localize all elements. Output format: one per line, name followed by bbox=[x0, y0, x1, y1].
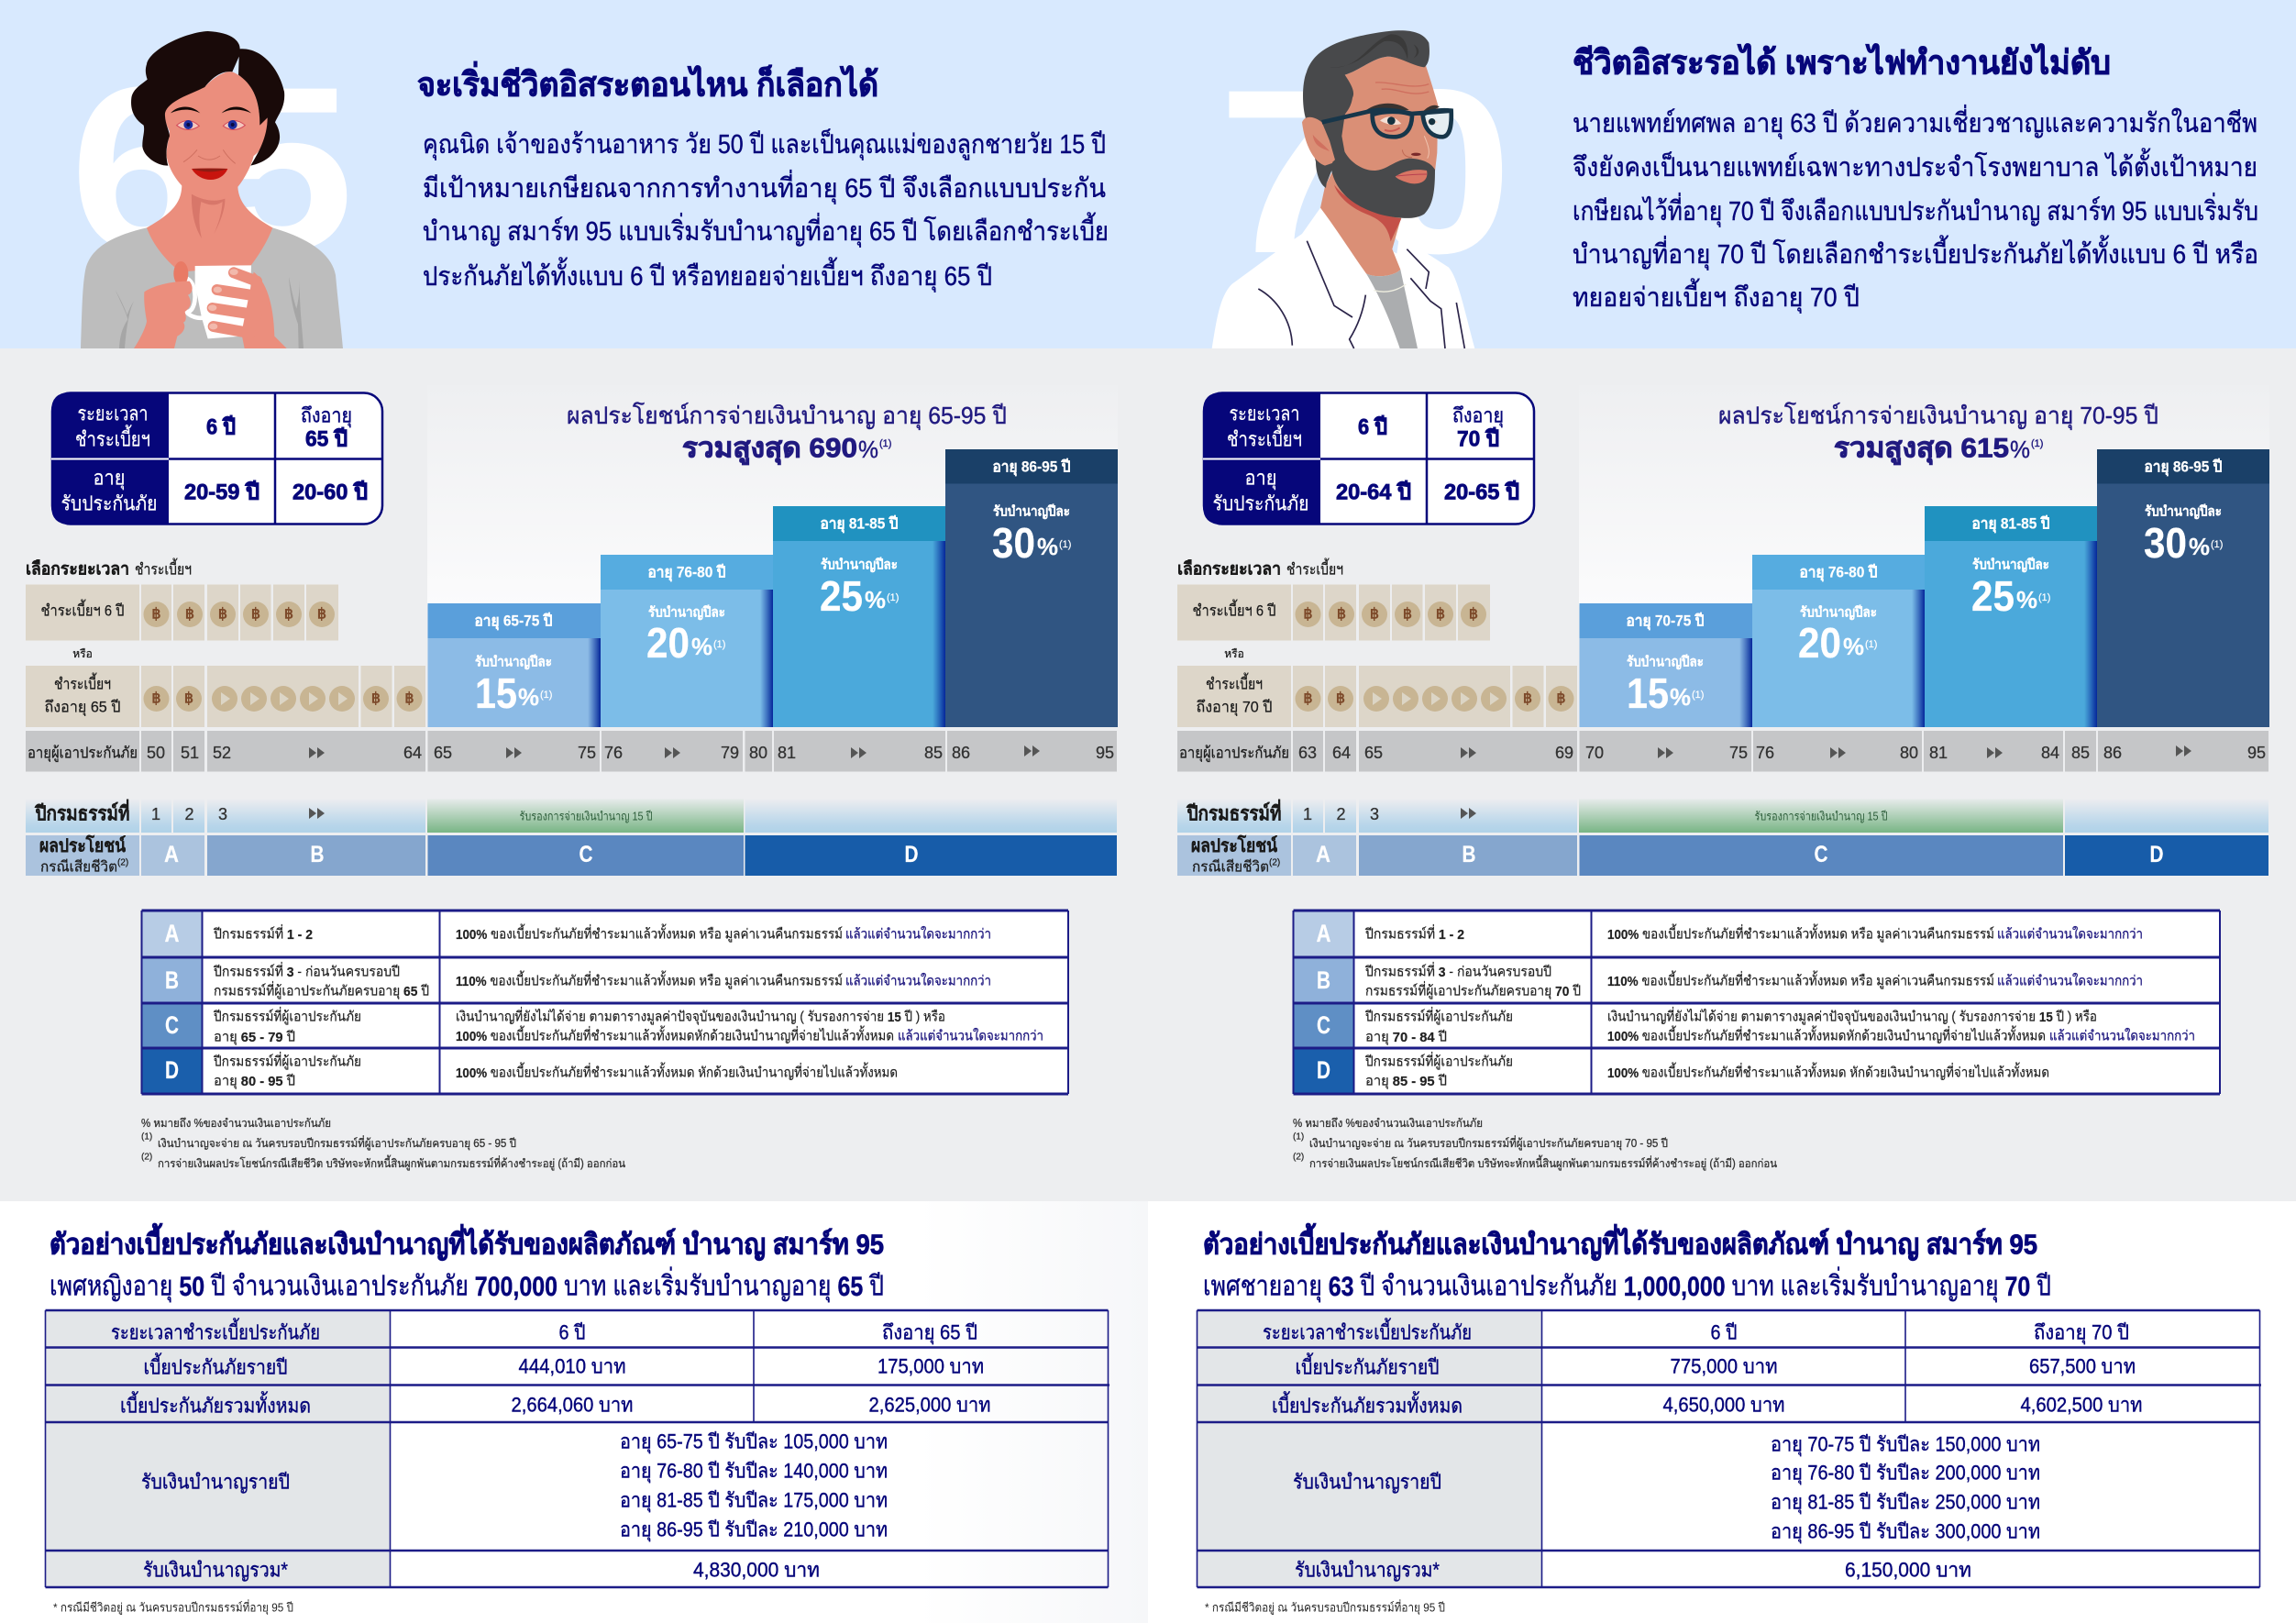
text block: left top body: คุณนิด เจ้าของร้านอาหาร วัย 50 ปี และเป็นคุณแม่ของลูกชายวัย 15 ปี bbox=[423, 127, 1106, 160]
table: right premium and pension example: 6,150,000 บาท bbox=[1845, 1559, 1971, 1581]
row: insured age timeline: 75 bbox=[1729, 744, 1748, 762]
text block: footnotes: (1) bbox=[1293, 1132, 1304, 1143]
bar: age 81-85: (1) bbox=[887, 592, 899, 603]
text block: footnotes: % หมายถึง %ของจำนวนเงินเอาประกันภัย bbox=[141, 1117, 331, 1130]
table: death benefit conditions: 110% ของเบี้ยประกันภัยที่ชำระมาแล้วทั้งหมด หรือ มูลค่าเวนคืนกรมธรรม์ bbox=[1607, 970, 1994, 988]
row: death benefit bands: D bbox=[904, 842, 919, 867]
row: pay 6 years: ฿ bbox=[1337, 607, 1346, 622]
table: premium term and entry age: ชำระเบี้ยฯ bbox=[1227, 425, 1302, 451]
row: policy year: 1 bbox=[1303, 805, 1312, 823]
table: premium term and entry age: ระยะเวลา bbox=[1229, 402, 1300, 425]
table: right premium and pension example: อายุ 81-85 ปี รับปีละ 250,000 บาท bbox=[1771, 1491, 2040, 1515]
bar: age 86-95: (1) bbox=[1059, 539, 1071, 550]
heading: chart title: (1) bbox=[879, 438, 891, 449]
text block: footnotes: การจ่ายเงินผลประโยชน์กรณีเสียชีวิต บริษัทจะหักหนี้สินผูกพันตามกรมธรรม์ที่ค้างชำระอยู่ (ถ้ามี) ออกก่อน bbox=[1309, 1154, 1777, 1171]
table: death benefit conditions: ปีกรมธรรม์ที่ผู้เอาประกันภัย bbox=[213, 1051, 361, 1069]
table: right premium and pension example: 657,500 บาท bbox=[2029, 1355, 2136, 1377]
row: death benefit bands bbox=[1177, 834, 2268, 876]
text block: left example note: * กรณีมีชีวิตอยู่ ณ วันครบรอบปีกรมธรรม์ที่อายุ 95 ปี bbox=[53, 1599, 293, 1616]
row: insured age timeline: 79 bbox=[721, 744, 739, 762]
row: insured age timeline: 95 bbox=[2247, 744, 2266, 762]
row: policy year bbox=[26, 798, 1117, 833]
label: or: หรือ bbox=[72, 647, 93, 660]
row: pay 6 years bbox=[26, 585, 338, 640]
row: death benefit bands: กรณีเสียชีวิต bbox=[1192, 858, 1269, 875]
row: policy year: 3 bbox=[1370, 805, 1379, 823]
row: insured age timeline: 64 bbox=[1332, 744, 1351, 762]
bar: age 81-85 bbox=[773, 506, 945, 727]
row: pay 6 years: ชำระเบี้ยฯ 6 ปี bbox=[1192, 600, 1276, 620]
row: insured age timeline: 76 bbox=[1756, 744, 1774, 762]
bar: age 76-80: รับบำนาญปีละ bbox=[648, 605, 725, 620]
row: pay until age 65: ถึงอายุ 65 ปี bbox=[44, 699, 121, 717]
row: death benefit bands: B bbox=[1462, 842, 1476, 867]
table: death benefit conditions: อายุ 70 - 84 ปี bbox=[1365, 1029, 1447, 1045]
table: death benefit conditions: แล้วแต่จำนวนใดจะมากกว่า bbox=[845, 972, 991, 988]
chart: pension benefit steps bbox=[427, 385, 1118, 727]
table: premium term and entry age: อายุ bbox=[94, 466, 125, 490]
bar: age 81-85: % bbox=[2016, 586, 2037, 613]
bar: age 86-95 bbox=[2097, 449, 2269, 727]
table: right premium and pension example bbox=[1198, 1310, 2261, 1587]
row: insured age timeline: 65 bbox=[1364, 744, 1383, 762]
table: left premium and pension example: รับเงินบำนาญรวม* bbox=[143, 1559, 288, 1581]
table: premium term and entry age: 6 ปี bbox=[1358, 414, 1387, 440]
table: death benefit conditions: 100% ของเบี้ยประกันภัยที่ชำระมาแล้วทั้งหมด หักด้วยเงินบำนาญที่จ่ายไปแล้วทั้งหมด bbox=[1607, 1062, 2049, 1080]
bar: age 81-85 bbox=[1925, 506, 2097, 727]
row: policy year: 2 bbox=[1336, 805, 1346, 823]
row: death benefit bands: C bbox=[580, 842, 592, 867]
row: policy year: ปีกรมธรรม์ที่ bbox=[34, 798, 130, 825]
heading: left top title: จะเริ่มชีวิตอิสระตอนไหน ก็เลือกได้ bbox=[417, 61, 878, 103]
row: pay until age 65: ฿ bbox=[151, 691, 161, 706]
row: insured age timeline: 70 bbox=[1585, 744, 1604, 762]
row: insured age timeline: 84 bbox=[2041, 744, 2059, 762]
table: left premium and pension example: อายุ 65-75 ปี รับปีละ 105,000 บาท bbox=[620, 1430, 888, 1454]
bar: age 76-80: % bbox=[691, 633, 712, 660]
row: insured age timeline: 86 bbox=[2103, 744, 2122, 762]
bar: age 81-85: อายุ 81-85 ปี bbox=[820, 513, 899, 534]
bar: age 76-80: รับบำนาญปีละ bbox=[1800, 605, 1877, 620]
text block: footnotes: การจ่ายเงินผลประโยชน์กรณีเสียชีวิต บริษัทจะหักหนี้สินผูกพันตามกรมธรรม์ที่ค้างชำระอยู่ (ถ้ามี) ออกก่อน bbox=[158, 1154, 625, 1171]
row: insured age timeline: 75 bbox=[578, 744, 596, 762]
table: premium term and entry age bbox=[1203, 392, 1534, 524]
table: death benefit conditions bbox=[141, 911, 1068, 1094]
heading: right top title: ชีวิตอิสระรอได้ เพราะไฟทำงานยังไม่ดับ bbox=[1573, 42, 2111, 81]
table: right premium and pension example: ระยะเวลาชำระเบี้ยประกันภัย bbox=[1263, 1319, 1472, 1344]
bar: age 76-80: อายุ 76-80 ปี bbox=[1799, 563, 1878, 581]
row: insured age timeline: 69 bbox=[1555, 744, 1573, 762]
heading: choose premium term: ชำระเบี้ยฯ bbox=[135, 558, 192, 578]
row: insured age timeline bbox=[26, 731, 1117, 772]
row: pay until age 65: ฿ bbox=[404, 691, 414, 706]
row: policy year: ปีกรมธรรม์ที่ bbox=[1186, 798, 1282, 825]
bar: age 65-75: (1) bbox=[540, 690, 552, 701]
table: premium term and entry age: 20-64 ปี bbox=[1336, 480, 1411, 504]
table: death benefit conditions: อายุ 85 - 95 ปี bbox=[1365, 1073, 1447, 1089]
bar: age 86-95 bbox=[945, 449, 1118, 727]
row: policy year: 1 bbox=[151, 805, 160, 823]
text block: footnotes: (2) bbox=[141, 1152, 152, 1163]
icon: woman illustration bbox=[81, 31, 343, 348]
table: right premium and pension example: ถึงอายุ 70 ปี bbox=[2034, 1320, 2129, 1344]
text block: left top body: บำนาญ สมาร์ท 95 แบบเริ่มรับบำนาญที่อายุ 65 ปี โดยเลือกชำระเบี้ย bbox=[423, 212, 1109, 248]
panel: bottom white background left bbox=[0, 1201, 1148, 1623]
table: premium term and entry age: รับประกันภัย bbox=[1212, 491, 1309, 515]
table: right premium and pension example: อายุ 70-75 ปี รับปีละ 150,000 บาท bbox=[1771, 1432, 2040, 1456]
text block: left top body bbox=[423, 127, 1109, 293]
row: pay until age 70: ถึงอายุ 70 ปี bbox=[1196, 699, 1273, 717]
row: policy year: รับรองการจ่ายเงินบำนาญ 15 ปี bbox=[519, 809, 653, 823]
heading: chart title: ผลประโยชน์การจ่ายเงินบำนาญ อายุ 65-95 ปี bbox=[567, 402, 1007, 430]
table: death benefit conditions: 100% ของเบี้ยประกันภัยที่ชำระมาแล้วทั้งหมด หรือ มูลค่าเวนคืนกรมธรรม์ bbox=[456, 924, 843, 943]
row: pay until age 70 bbox=[1177, 666, 1577, 727]
heading: choose premium term: เลือกระยะเวลา bbox=[1177, 559, 1281, 580]
text block: footnotes bbox=[1293, 1117, 1777, 1171]
row: pay until age 70: ฿ bbox=[1523, 691, 1532, 706]
label: or: หรือ bbox=[1224, 647, 1244, 660]
bar: age 81-85: รับบำนาญปีละ bbox=[821, 558, 898, 572]
row: death benefit bands: B bbox=[310, 842, 325, 867]
table: premium term and entry age: ระยะเวลา bbox=[77, 402, 149, 425]
heading: choose premium term bbox=[1177, 558, 1343, 580]
bar: age 76-80: อายุ 76-80 ปี bbox=[647, 563, 726, 581]
bar: age 86-95: อายุ 86-95 ปี bbox=[992, 457, 1071, 477]
bar: age 86-95: รับบำนาญปีละ bbox=[2145, 504, 2222, 519]
row: pay 6 years: ฿ bbox=[284, 607, 293, 622]
row: pay 6 years: ฿ bbox=[1403, 607, 1412, 622]
panel: middle grey background right bbox=[1148, 348, 2296, 1201]
bar: age 76-80: (1) bbox=[1865, 639, 1877, 650]
text block: footnotes: % หมายถึง %ของจำนวนเงินเอาประกันภัย bbox=[1293, 1117, 1483, 1130]
table: death benefit conditions: เงินบำนาญที่ยังไม่ได้จ่าย ตามตารางมูลค่าปัจจุบันของเงินบำนาญ ( รับรองการจ่าย 15 ปี ) หรือ bbox=[456, 1007, 945, 1025]
panel: bottom white background right bbox=[1148, 1201, 2296, 1623]
table: right premium and pension example: รับเงินบำนาญรวม* bbox=[1295, 1559, 1440, 1581]
bar: age 81-85: อายุ 81-85 ปี bbox=[1971, 513, 2050, 534]
bar: age 76-80 bbox=[1752, 555, 1925, 727]
row: insured age timeline: 81 bbox=[1929, 744, 1948, 762]
table: death benefit conditions: C bbox=[165, 1011, 179, 1039]
table: death benefit conditions: แล้วแต่จำนวนใดจะมากกว่า bbox=[898, 1027, 1043, 1043]
table: left premium and pension example: 444,010 บาท bbox=[519, 1355, 625, 1377]
bar: age 65-75: % bbox=[518, 683, 539, 711]
row: death benefit bands: A bbox=[1316, 842, 1330, 867]
row: pay until age 65 bbox=[26, 666, 425, 727]
row: policy year bbox=[1177, 798, 2268, 833]
row: pay 6 years: ฿ bbox=[1469, 607, 1478, 622]
row: insured age timeline: 51 bbox=[181, 744, 199, 762]
panel: right page top band bbox=[1148, 0, 2296, 348]
table: premium term and entry age: ถึงอายุ bbox=[1452, 403, 1504, 427]
table: left premium and pension example: อายุ 81-85 ปี รับปีละ 175,000 บาท bbox=[620, 1489, 888, 1513]
bar: age 81-85: 25 bbox=[820, 572, 863, 620]
bar: age 86-95: อายุ 86-95 ปี bbox=[2144, 457, 2223, 477]
row: pay 6 years: ฿ bbox=[251, 607, 260, 622]
table: left premium and pension example bbox=[46, 1310, 1109, 1587]
row: insured age timeline: 65 bbox=[434, 744, 452, 762]
row: insured age timeline: 64 bbox=[403, 744, 422, 762]
bar: age 76-80: (1) bbox=[713, 639, 725, 650]
row: pay 6 years: ชำระเบี้ยฯ 6 ปี bbox=[40, 600, 125, 620]
bar: age 81-85: (1) bbox=[2038, 592, 2050, 603]
big number 70: 70 bbox=[1218, 41, 1513, 303]
table: death benefit conditions: กรมธรรม์ที่ผู้เอาประกันภัยครบอายุ 65 ปี bbox=[214, 981, 429, 999]
heading: left example title: ตัวอย่างเบี้ยประกันภัยและเงินบำนาญที่ได้รับของผลิตภัณฑ์ บำนาญ สมาร์ท 95 bbox=[50, 1223, 884, 1262]
table: left premium and pension example: ระยะเวลาชำระเบี้ยประกันภัย bbox=[111, 1319, 320, 1344]
row: death benefit bands: ผลประโยชน์ bbox=[39, 834, 126, 856]
icon: bearded doctor illustration bbox=[1212, 30, 1474, 348]
row: policy year: 2 bbox=[184, 805, 194, 823]
heading: chart title: (1) bbox=[2031, 438, 2043, 449]
row: death benefit bands: A bbox=[164, 842, 179, 867]
chart: pension benefit steps bbox=[1579, 385, 2269, 727]
bar: age 76-80: 20 bbox=[1798, 619, 1841, 667]
table: death benefit conditions: 100% ของเบี้ยประกันภัยที่ชำระมาแล้วทั้งหมด หักด้วยเงินบำนาญที่จ่ายไปแล้วทั้งหมด bbox=[456, 1062, 898, 1080]
panel: left plan section bbox=[26, 385, 1118, 1616]
text block: footnotes: (1) bbox=[141, 1132, 152, 1143]
bar: age 65-75: รับบำนาญปีละ bbox=[475, 655, 552, 669]
table: death benefit conditions: 110% ของเบี้ยประกันภัยที่ชำระมาแล้วทั้งหมด หรือ มูลค่าเวนคืนกรมธรรม์ bbox=[456, 970, 843, 988]
bar: age 86-95: 30 bbox=[2144, 519, 2187, 567]
bar: age 70-75: 15 bbox=[1627, 669, 1669, 717]
text block: footnotes: (2) bbox=[1293, 1152, 1304, 1163]
row: insured age timeline: อายุผู้เอาประกันภัย bbox=[28, 745, 138, 763]
heading: chart title: % bbox=[858, 436, 878, 463]
table: right premium and pension example: เบี้ยประกันภัยรวมทั้งหมด bbox=[1272, 1392, 1463, 1418]
text block: left top body: มีเป้าหมายเกษียณจากการทำงานที่อายุ 65 ปี จึงเลือกแบบประกัน bbox=[423, 170, 1106, 204]
heading: chart title bbox=[567, 402, 1007, 466]
table: left premium and pension example: ถึงอายุ 65 ปี bbox=[882, 1320, 977, 1344]
row: pay until age 70: ฿ bbox=[1336, 691, 1345, 706]
panel: middle grey background left bbox=[0, 348, 1148, 1201]
table: death benefit conditions: 100% ของเบี้ยประกันภัยที่ชำระมาแล้วทั้งหมดหักด้วยเงินบำนาญที่จ่ายไปแล้วทั้งหมด bbox=[456, 1025, 894, 1043]
table: left premium and pension example: 2,625,000 บาท bbox=[869, 1394, 990, 1416]
table: premium term and entry age: รับประกันภัย bbox=[61, 491, 158, 515]
row: pay 6 years: ฿ bbox=[1370, 607, 1379, 622]
heading: right example title: ตัวอย่างเบี้ยประกันภัยและเงินบำนาญที่ได้รับของผลิตภัณฑ์ บำนาญ สมาร์ท 95 bbox=[1203, 1223, 2037, 1262]
bar: age 76-80 bbox=[601, 555, 773, 727]
table: death benefit conditions: แล้วแต่จำนวนใดจะมากกว่า bbox=[1997, 972, 2143, 988]
table: death benefit conditions: แล้วแต่จำนวนใดจะมากกว่า bbox=[1997, 926, 2143, 943]
table: death benefit conditions: ปีกรมธรรม์ที่ 3 - ก่อนวันครบรอบปี bbox=[1364, 961, 1551, 979]
row: pay 6 years bbox=[1177, 585, 1490, 640]
table: premium term and entry age: ถึงอายุ bbox=[301, 403, 352, 427]
row: insured age timeline: 85 bbox=[2071, 744, 2090, 762]
text block: footnotes: เงินบำนาญจะจ่าย ณ วันครบรอบปีกรมธรรม์ที่ผู้เอาประกันภัยครบอายุ 65 - 95 ปี bbox=[158, 1135, 516, 1151]
row: insured age timeline: 50 bbox=[147, 744, 165, 762]
table: left premium and pension example: 175,000 บาท bbox=[878, 1355, 984, 1377]
row: insured age timeline: 63 bbox=[1298, 744, 1317, 762]
table: premium term and entry age: 20-65 ปี bbox=[1444, 480, 1519, 504]
table: left premium and pension example: รับเงินบำนาญรายปี bbox=[141, 1471, 290, 1493]
table: premium term and entry age: 65 ปี bbox=[305, 427, 348, 451]
big number 65: 65 bbox=[70, 39, 354, 300]
row: pay 6 years: ฿ bbox=[151, 607, 161, 622]
table: left premium and pension example: 2,664,060 บาท bbox=[512, 1394, 633, 1416]
table: death benefit conditions: A bbox=[1317, 920, 1331, 947]
heading: choose premium term bbox=[26, 558, 192, 580]
row: insured age timeline: 81 bbox=[778, 744, 796, 762]
bar: age 86-95: (1) bbox=[2211, 539, 2223, 550]
heading: chart title: รวมสูงสุด 690 bbox=[682, 433, 857, 466]
heading: choose premium term: เลือกระยะเวลา bbox=[26, 559, 129, 580]
bar: age 86-95: % bbox=[2189, 533, 2210, 560]
row: insured age timeline: 76 bbox=[604, 744, 623, 762]
row: insured age timeline: 80 bbox=[1900, 744, 1918, 762]
row: insured age timeline: 86 bbox=[952, 744, 970, 762]
table: death benefit conditions: อายุ 65 - 79 ปี bbox=[214, 1029, 295, 1045]
table: death benefit conditions: ปีกรมธรรม์ที่ 1 - 2 bbox=[213, 924, 313, 943]
bar: age 76-80: % bbox=[1843, 633, 1864, 660]
text block: right top body: ทยอยจ่ายเบี้ยฯ ถึงอายุ 70 ปี bbox=[1573, 278, 1860, 314]
row: pay 6 years: ฿ bbox=[317, 607, 326, 622]
table: right premium and pension example: 775,000 บาท bbox=[1671, 1355, 1777, 1377]
text block: footnotes: เงินบำนาญจะจ่าย ณ วันครบรอบปีกรมธรรม์ที่ผู้เอาประกันภัยครบอายุ 70 - 95 ปี bbox=[1309, 1135, 1668, 1151]
row: insured age timeline: อายุผู้เอาประกันภัย bbox=[1179, 745, 1289, 763]
table: death benefit conditions: 100% ของเบี้ยประกันภัยที่ชำระมาแล้วทั้งหมดหักด้วยเงินบำนาญที่จ่ายไปแล้วทั้งหมด bbox=[1607, 1025, 2046, 1043]
row: pay until age 65: ฿ bbox=[371, 691, 381, 706]
bar: age 65-75: อายุ 65-75 ปี bbox=[475, 611, 553, 631]
row: pay 6 years: ฿ bbox=[218, 607, 227, 622]
row: death benefit bands: (2) bbox=[1269, 858, 1280, 867]
bar: age 70-75: % bbox=[1670, 683, 1691, 711]
table: death benefit conditions: B bbox=[1317, 966, 1330, 994]
table: death benefit conditions: A bbox=[165, 920, 180, 947]
table: death benefit conditions: D bbox=[165, 1056, 179, 1084]
text block: right example note: * กรณีมีชีวิตอยู่ ณ วันครบรอบปีกรมธรรม์ที่อายุ 95 ปี bbox=[1205, 1599, 1445, 1616]
row: death benefit bands: (2) bbox=[117, 858, 128, 867]
row: death benefit bands: D bbox=[2149, 842, 2164, 867]
heading: choose premium term: ชำระเบี้ยฯ bbox=[1286, 558, 1343, 578]
row: pay until age 70: ชำระเบี้ยฯ bbox=[1206, 673, 1263, 693]
bar: age 76-80: 20 bbox=[646, 619, 690, 667]
bar: age 86-95: % bbox=[1037, 533, 1058, 560]
table: left premium and pension example: อายุ 76-80 ปี รับปีละ 140,000 บาท bbox=[620, 1460, 888, 1484]
table: right premium and pension example: อายุ 86-95 ปี รับปีละ 300,000 บาท bbox=[1771, 1520, 2040, 1544]
row: pay until age 65: ชำระเบี้ยฯ bbox=[54, 673, 111, 693]
bar: age 86-95: 30 bbox=[992, 519, 1035, 567]
row: policy year: 3 bbox=[218, 805, 227, 823]
table: right premium and pension example: รับเงินบำนาญรายปี bbox=[1293, 1471, 1441, 1493]
row: pay 6 years: ฿ bbox=[1303, 607, 1313, 622]
bar: age 81-85: % bbox=[865, 586, 886, 613]
table: left premium and pension example: อายุ 86-95 ปี รับปีละ 210,000 บาท bbox=[620, 1518, 888, 1542]
heading: right example subtitle: เพศชายอายุ 63 ปี จำนวนเงินเอาประกันภัย 1,000,000 บาท และเริ่มรับบำนาญอายุ 70 ปี bbox=[1203, 1267, 2051, 1304]
bar: age 81-85: 25 bbox=[1971, 572, 2015, 620]
row: insured age timeline: 95 bbox=[1096, 744, 1114, 762]
row: insured age timeline bbox=[1177, 731, 2268, 772]
row: death benefit bands: ผลประโยชน์ bbox=[1191, 834, 1277, 856]
bar: age 70-75: รับบำนาญปีละ bbox=[1627, 655, 1704, 669]
table: death benefit conditions: ปีกรมธรรม์ที่ 3 - ก่อนวันครบรอบปี bbox=[213, 961, 400, 979]
table: death benefit conditions: C bbox=[1317, 1011, 1330, 1039]
table: premium term and entry age: 20-60 ปี bbox=[293, 480, 368, 504]
table: right premium and pension example: อายุ 76-80 ปี รับปีละ 200,000 บาท bbox=[1771, 1462, 2040, 1485]
bar: age 70-75: (1) bbox=[1692, 690, 1704, 701]
table: premium term and entry age: 20-59 ปี bbox=[184, 480, 259, 504]
table: death benefit conditions: 100% ของเบี้ยประกันภัยที่ชำระมาแล้วทั้งหมด หรือ มูลค่าเวนคืนกรมธรรม์ bbox=[1607, 924, 1994, 943]
heading: chart title: ผลประโยชน์การจ่ายเงินบำนาญ อายุ 70-95 ปี bbox=[1718, 402, 2158, 430]
table: death benefit conditions: D bbox=[1317, 1056, 1330, 1084]
table: death benefit conditions: แล้วแต่จำนวนใดจะมากกว่า bbox=[2049, 1027, 2195, 1043]
table: left premium and pension example: เบี้ยประกันภัยรายปี bbox=[143, 1353, 288, 1379]
row: pay 6 years: ฿ bbox=[185, 607, 194, 622]
table: death benefit conditions: ปีกรมธรรม์ที่ผู้เอาประกันภัย bbox=[1364, 1051, 1513, 1069]
row: policy year: รับรองการจ่ายเงินบำนาญ 15 ปี bbox=[1755, 809, 1887, 823]
table: right premium and pension example: 6 ปี bbox=[1711, 1320, 1737, 1344]
text block: footnotes bbox=[141, 1117, 625, 1171]
bar: age 70-75 bbox=[1579, 603, 1752, 727]
row: insured age timeline: 80 bbox=[749, 744, 767, 762]
panel: left page top band bbox=[0, 0, 1148, 348]
panel: right plan section bbox=[1177, 385, 2269, 1616]
row: pay 6 years: ฿ bbox=[1436, 607, 1445, 622]
bar: age 65-75 bbox=[427, 603, 601, 727]
table: death benefit conditions: แล้วแต่จำนวนใดจะมากกว่า bbox=[845, 926, 991, 943]
table: death benefit conditions bbox=[1293, 911, 2220, 1094]
heading: chart title bbox=[1718, 402, 2158, 466]
row: pay until age 70: ฿ bbox=[1556, 691, 1566, 706]
bar: age 86-95: รับบำนาญปีละ bbox=[993, 504, 1070, 519]
table: premium term and entry age: 6 ปี bbox=[206, 414, 236, 440]
table: left premium and pension example: 4,830,000 บาท bbox=[693, 1559, 820, 1581]
table: premium term and entry age: อายุ bbox=[1245, 466, 1276, 490]
heading: chart title: รวมสูงสุด 615 bbox=[1834, 433, 2009, 466]
table: death benefit conditions: ปีกรมธรรม์ที่ 1 - 2 bbox=[1364, 924, 1464, 943]
row: death benefit bands: กรณีเสียชีวิต bbox=[40, 858, 117, 875]
table: death benefit conditions: ปีกรมธรรม์ที่ผู้เอาประกันภัย bbox=[1364, 1007, 1513, 1025]
table: right premium and pension example: เบี้ยประกันภัยรายปี bbox=[1295, 1353, 1440, 1379]
table: death benefit conditions: กรมธรรม์ที่ผู้เอาประกันภัยครบอายุ 70 ปี bbox=[1365, 981, 1581, 999]
bar: age 65-75: 15 bbox=[475, 669, 517, 717]
table: premium term and entry age: ชำระเบี้ยฯ bbox=[75, 425, 150, 451]
row: insured age timeline: 85 bbox=[924, 744, 943, 762]
table: premium term and entry age: 70 ปี bbox=[1457, 427, 1499, 451]
row: insured age timeline: 52 bbox=[213, 744, 231, 762]
table: death benefit conditions: อายุ 80 - 95 ปี bbox=[214, 1073, 295, 1089]
table: right premium and pension example: 4,602,500 บาท bbox=[2021, 1394, 2142, 1416]
table: left premium and pension example: เบี้ยประกันภัยรวมทั้งหมด bbox=[120, 1392, 311, 1418]
text block: right top body bbox=[1573, 105, 2258, 314]
bar: age 81-85: รับบำนาญปีละ bbox=[1972, 558, 2049, 572]
row: death benefit bands bbox=[26, 834, 1117, 876]
text block: left top body: ประกันภัยได้ทั้งแบบ 6 ปี หรือทยอยจ่ายเบี้ยฯ ถึงอายุ 65 ปี bbox=[423, 257, 992, 293]
table: death benefit conditions: ปีกรมธรรม์ที่ผู้เอาประกันภัย bbox=[213, 1007, 361, 1025]
table: death benefit conditions: B bbox=[165, 966, 179, 994]
row: death benefit bands: C bbox=[1814, 842, 1828, 867]
table: left premium and pension example: 6 ปี bbox=[559, 1320, 585, 1344]
table: right premium and pension example: 4,650,000 บาท bbox=[1663, 1394, 1784, 1416]
heading: chart title: % bbox=[2010, 436, 2030, 463]
row: pay until age 70: ฿ bbox=[1303, 691, 1313, 706]
heading: left example subtitle: เพศหญิงอายุ 50 ปี จำนวนเงินเอาประกันภัย 700,000 บาท และเริ่มรับบำนาญอายุ 65 ปี bbox=[50, 1267, 884, 1304]
row: pay until age 65: ฿ bbox=[184, 691, 193, 706]
table: premium term and entry age bbox=[51, 392, 382, 524]
bar: age 70-75: อายุ 70-75 ปี bbox=[1627, 611, 1705, 631]
table: death benefit conditions: เงินบำนาญที่ยังไม่ได้จ่าย ตามตารางมูลค่าปัจจุบันของเงินบำนาญ ( รับรองการจ่าย 15 ปี ) หรือ bbox=[1607, 1007, 2097, 1025]
